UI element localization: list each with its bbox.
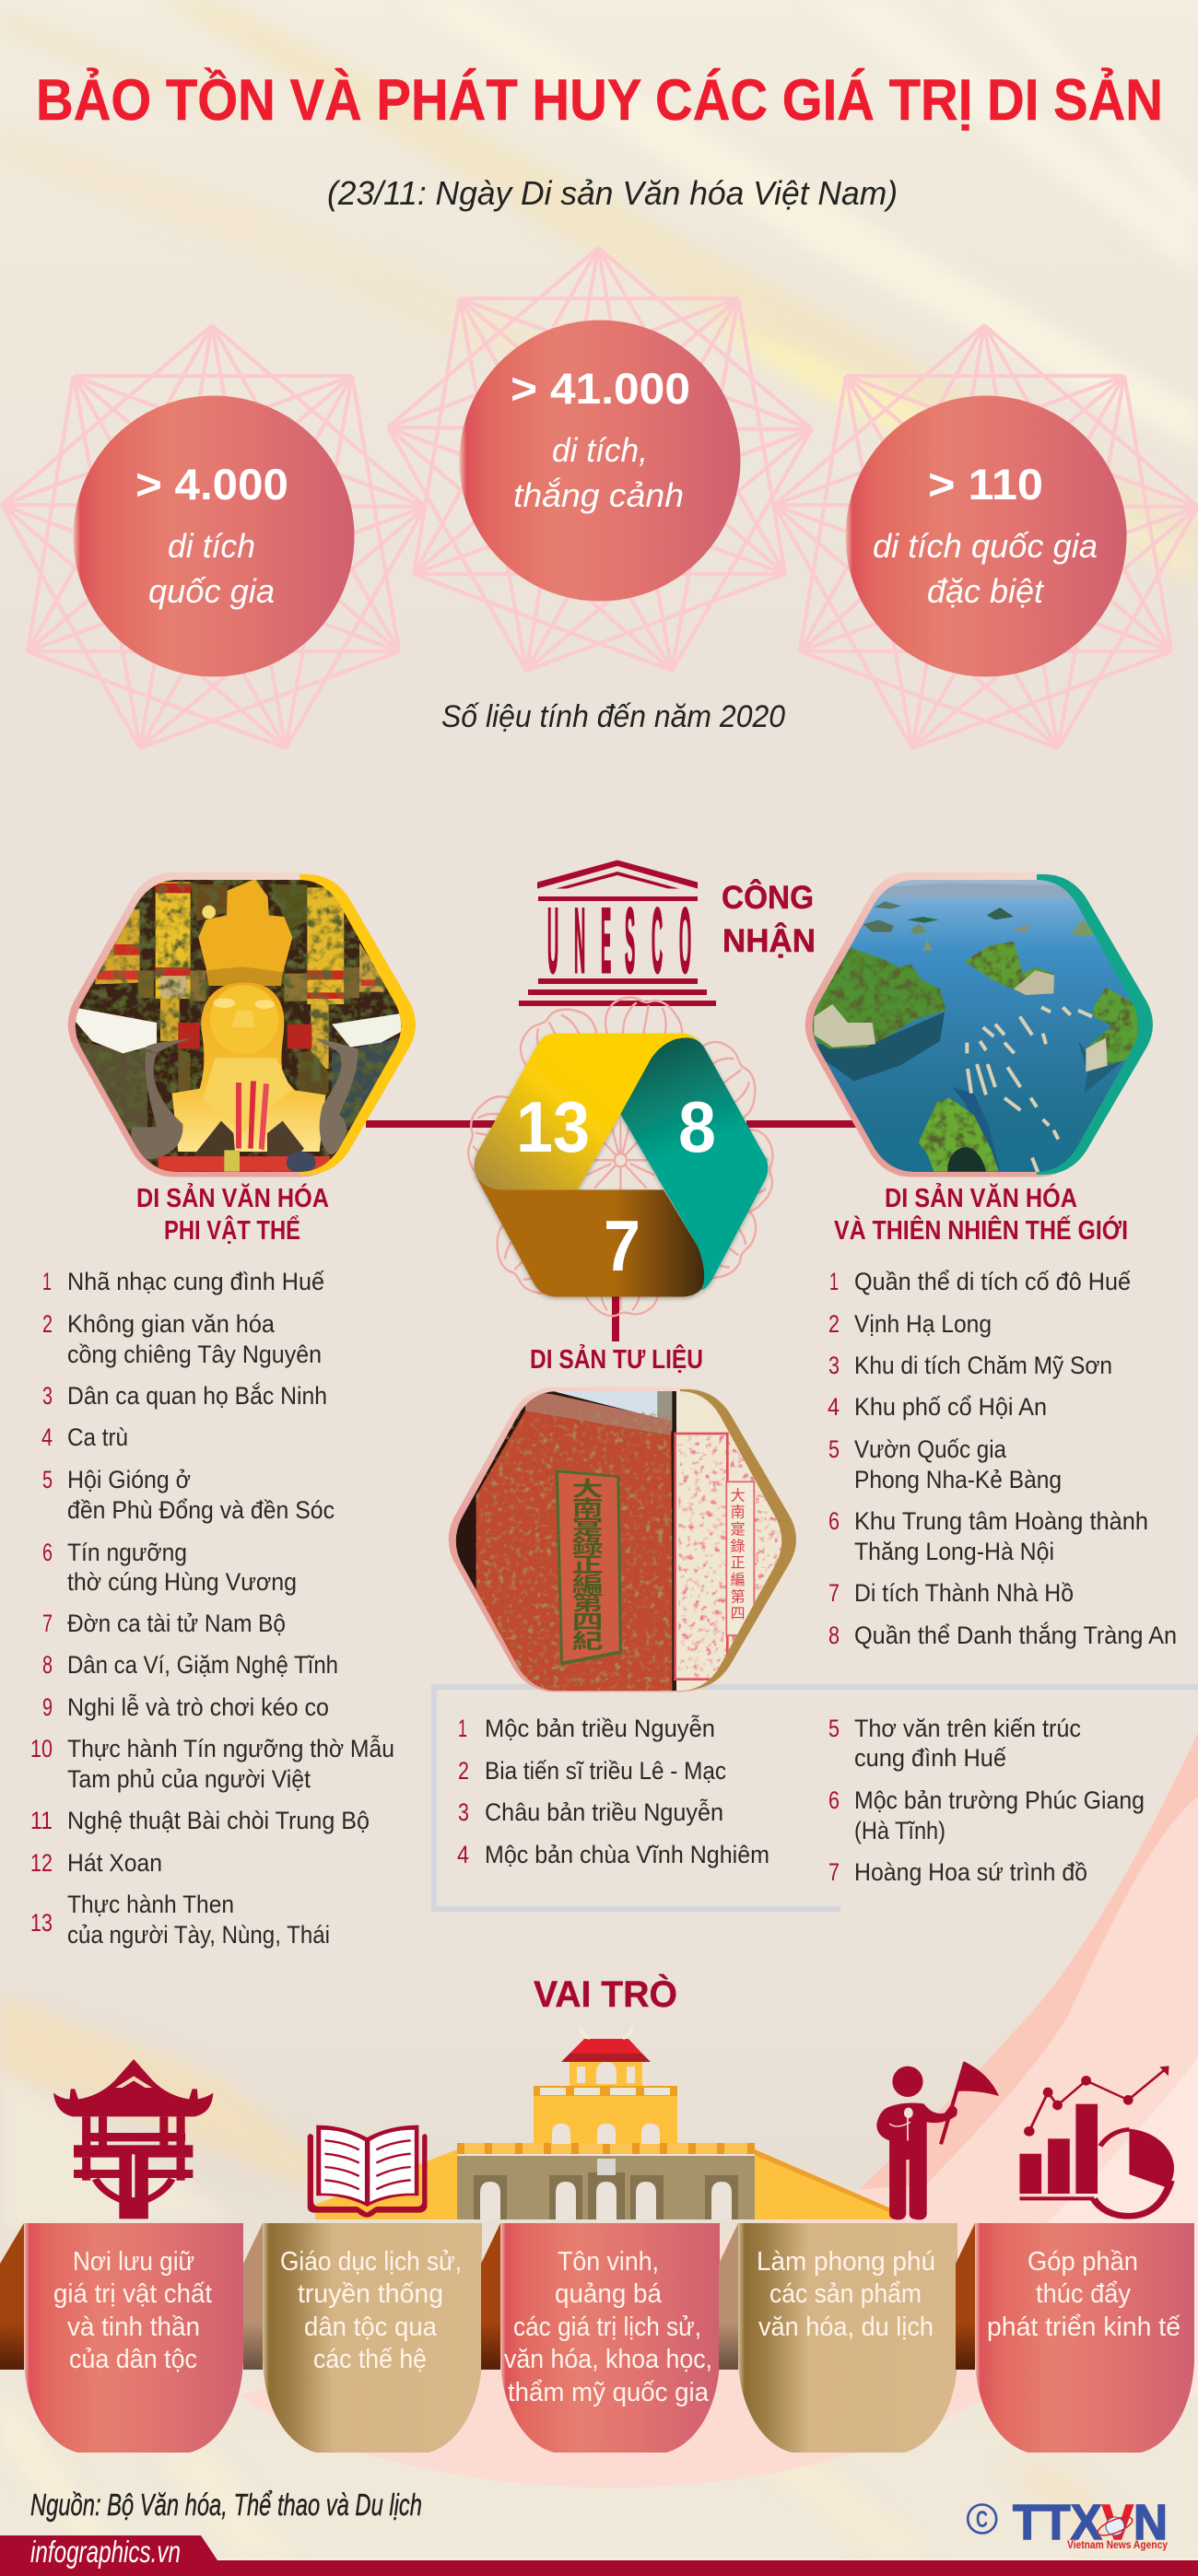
list: intangible heritage: 9	[42, 1693, 53, 1721]
list: intangible heritage: Đờn ca tài tử Nam Bộ	[67, 1610, 286, 1637]
list: world heritage: Thăng Long-Hà Nội	[854, 1538, 1054, 1565]
stat: relics and scenic sites: > 41.000	[511, 364, 690, 413]
card: honoring values: các giá trị lịch sử,	[513, 2313, 701, 2342]
UNESCO recognized label	[722, 879, 816, 959]
list: intangible heritage: Không gian văn hóa	[67, 1310, 276, 1338]
list: world heritage: 4	[828, 1393, 840, 1421]
website: infographics.vn	[30, 2535, 181, 2569]
list: intangible heritage: 1	[42, 1268, 52, 1295]
UNESCO logo	[519, 861, 716, 1006]
data note: Số liệu tính đến năm 2020	[441, 699, 785, 734]
card: honoring values	[481, 2223, 720, 2453]
card: preserving values: Nơi lưu giữ	[73, 2247, 194, 2277]
list: intangible heritage: Nghệ thuật Bài chòi Trung Bộ	[67, 1807, 370, 1834]
list: intangible heritage: Ca trù	[67, 1423, 128, 1451]
list: intangible heritage: 5	[42, 1466, 53, 1493]
list: intangible heritage: 11	[30, 1807, 53, 1834]
list: intangible heritage: Dân ca quan họ Bắc Ninh	[67, 1381, 327, 1410]
list: documentary heritage: 6	[828, 1786, 840, 1814]
list: documentary heritage: Mộc bản trường Phúc Giang	[854, 1786, 1145, 1814]
list: intangible heritage: Tam phủ của người Việt	[67, 1765, 311, 1793]
list: intangible heritage: đền Phù Đổng và đền Sóc	[67, 1496, 335, 1524]
list: intangible heritage: 4	[41, 1423, 53, 1451]
source note: Nguồn: Bộ Văn hóa, Thể thao và Du lịch	[30, 2488, 422, 2522]
list: intangible heritage: Tín ngưỡng	[67, 1539, 187, 1566]
hexagon photo: royal woodblock: 南	[731, 1505, 746, 1521]
card: educating history: các thế hệ	[313, 2345, 427, 2374]
list: world heritage: 7	[828, 1579, 840, 1607]
icon: open book	[308, 2125, 428, 2218]
hexagon photo: royal woodblock: 第	[572, 1592, 604, 1615]
card: preserving values: và tinh thần	[67, 2313, 200, 2342]
list: intangible heritage: 10	[30, 1735, 53, 1762]
list: documentary heritage: 5	[828, 1715, 840, 1742]
list: intangible heritage: Thực hành Then	[67, 1891, 234, 1918]
box around documentary heritage list	[434, 1687, 1198, 1909]
heading: world heritage	[834, 1182, 1128, 1246]
list: intangible heritage: 2	[42, 1310, 53, 1338]
footer bar	[0, 2535, 1198, 2576]
list: intangible heritage: thờ cúng Hùng Vương	[67, 1568, 297, 1596]
heading: roles: VAI TRÒ	[534, 1973, 677, 2015]
card: preserving values: giá trị vật chất	[53, 2279, 212, 2309]
count 8: 8	[678, 1086, 716, 1167]
stat: special national relics: đặc biệt	[927, 572, 1045, 610]
list: world heritage: 3	[828, 1352, 840, 1379]
list: documentary heritage: 7	[828, 1858, 840, 1886]
hexagon photo: intangible heritage statue	[68, 872, 416, 1177]
hexagon photo: royal woodblock: 錄	[731, 1538, 746, 1554]
hexagon photo: royal woodblock: 第	[731, 1587, 746, 1605]
card: preserving values: của dân tộc	[69, 2345, 197, 2374]
hexagon photo: royal woodblock: 編	[731, 1572, 746, 1588]
list: world heritage: Vịnh Hạ Long	[854, 1310, 992, 1338]
list: world heritage: 2	[828, 1310, 840, 1338]
card: enriching products	[719, 2223, 957, 2453]
hexagon photo: royal woodblock: 錄	[572, 1535, 604, 1558]
list: documentary heritage	[457, 1714, 1145, 1886]
illustration: Hanoi citadel flag tower	[315, 2027, 893, 2219]
hexagon photo: royal woodblock: 正	[731, 1556, 746, 1572]
list: documentary heritage: Mộc bản triều Nguyễn	[485, 1714, 715, 1742]
card: enriching products: Làm phong phú	[757, 2247, 935, 2277]
list: documentary heritage: 1	[458, 1715, 467, 1742]
list: documentary heritage: Thơ văn trên kiến trúc	[854, 1715, 1081, 1742]
heading: intangible heritage: DI SẢN VĂN HÓA	[136, 1182, 329, 1213]
hexagon photo: Ha Long Bay	[793, 872, 1161, 1177]
card: economic development: thúc đẩy	[1036, 2279, 1131, 2309]
list: intangible heritage: Dân ca Ví, Giặm Nghệ Tĩnh	[67, 1651, 338, 1679]
list: documentary heritage: 4	[457, 1841, 469, 1868]
card: educating history	[243, 2223, 482, 2453]
list: world heritage: Di tích Thành Nhà Hồ	[854, 1579, 1074, 1607]
card: honoring values: thẩm mỹ quốc gia	[508, 2378, 710, 2407]
list: world heritage	[828, 1268, 1177, 1649]
card: enriching products: văn hóa, du lịch	[758, 2313, 934, 2342]
list: intangible heritage: Nghi lễ và trò chơi kéo co	[67, 1692, 329, 1721]
heading: intangible heritage: PHI VẬT THỂ	[164, 1214, 300, 1246]
list: documentary heritage: 2	[458, 1757, 469, 1785]
hexagon photo: royal woodblock: 編	[572, 1574, 604, 1597]
heading: intangible heritage	[136, 1182, 329, 1246]
list: intangible heritage: 12	[30, 1849, 53, 1877]
UNESCO recognized label: CÔNG	[722, 879, 814, 916]
UNESCO recognized label: NHẬN	[722, 922, 816, 959]
ribbon: documentary heritage count	[476, 1177, 705, 1296]
list: intangible heritage: 7	[42, 1610, 53, 1637]
list: intangible heritage: của người Tày, Nùng, Thái	[67, 1921, 330, 1949]
list: world heritage: Quần thể di tích cố đô Huế	[854, 1268, 1131, 1295]
hexagon photo: royal woodblock: 大	[572, 1478, 604, 1501]
card: economic development	[956, 2223, 1194, 2453]
list: world heritage: 6	[828, 1507, 840, 1535]
list: intangible heritage: 13	[30, 1909, 53, 1937]
list: intangible heritage	[30, 1268, 394, 1949]
ribbon: intangible heritage count	[475, 1034, 702, 1189]
stat: relics and scenic sites: thắng cảnh	[513, 476, 684, 514]
list: documentary heritage: cung đình Huế	[854, 1744, 1006, 1772]
list: intangible heritage: 8	[42, 1651, 53, 1679]
hexagon photo: royal woodblock: 寔	[572, 1516, 604, 1540]
connector lines	[366, 1120, 857, 1341]
icon: one pillar pagoda	[53, 2059, 213, 2219]
ribbon hexagon with counts 13, 8, 7	[475, 1034, 768, 1296]
count 7: 7	[604, 1205, 640, 1286]
list: documentary heritage: Châu bản triều Nguyễn	[485, 1797, 723, 1826]
list: intangible heritage: Hát Xoan	[67, 1849, 162, 1877]
subtitle: (23/11: Ngày Di sản Văn hóa Việt Nam)	[327, 174, 898, 212]
list: intangible heritage: Nhã nhạc cung đình Huế	[67, 1268, 324, 1295]
list: world heritage: 5	[828, 1435, 840, 1463]
hexagon photo: royal woodblock: 南	[572, 1497, 604, 1520]
stat: special national relics: > 110	[928, 460, 1043, 509]
logo: TTXVN: TTXVN	[1013, 2495, 1168, 2550]
hexagon photo: royal woodblock: 四	[731, 1607, 746, 1622]
card: educating history: dân tộc qua	[304, 2313, 438, 2342]
ribbon: world heritage count	[620, 1037, 768, 1290]
list: world heritage: Vườn Quốc gia	[854, 1435, 1007, 1463]
icon: growth chart	[1019, 2066, 1174, 2216]
logo: TTXVN: Vietnam News Agency	[1067, 2540, 1169, 2551]
list: documentary heritage: Bia tiến sĩ triều Lê - Mạc	[485, 1757, 726, 1785]
stat: special national relics	[774, 325, 1198, 748]
card: economic development: Góp phần	[1028, 2247, 1138, 2277]
stat: national relics	[2, 325, 426, 748]
list: world heritage: Khu Trung tâm Hoàng thành	[854, 1507, 1148, 1535]
list: world heritage: Quần thể Danh thắng Tràng An	[854, 1621, 1177, 1649]
list: world heritage: Khu di tích Chăm Mỹ Sơn	[854, 1352, 1112, 1379]
hexagon photo: royal woodblock: 四	[572, 1611, 604, 1634]
list: world heritage: 8	[828, 1622, 840, 1649]
list: intangible heritage: Thực hành Tín ngưỡng thờ Mẫu	[67, 1734, 394, 1762]
card: honoring values: văn hóa, khoa học,	[504, 2345, 712, 2374]
heading: world heritage: VÀ THIÊN NHIÊN THẾ GIỚI	[834, 1214, 1128, 1246]
stat: national relics: quốc gia	[148, 572, 275, 610]
stat: relics and scenic sites: di tích,	[552, 431, 648, 469]
hexagon photo: royal woodblock	[442, 1382, 799, 1704]
list: documentary heritage: (Hà Tĩnh)	[854, 1817, 945, 1844]
card: educating history: Giáo dục lịch sử,	[280, 2247, 462, 2277]
icon: person with flag	[876, 2061, 999, 2219]
heading: world heritage: DI SẢN VĂN HÓA	[885, 1182, 1077, 1213]
hexagon photo: royal woodblock: 正	[572, 1554, 604, 1577]
card: educating history: truyền thống	[298, 2279, 443, 2309]
hexagon photo: royal woodblock: 紀	[572, 1631, 604, 1654]
card: honoring values: Tôn vinh,	[558, 2247, 659, 2277]
list: documentary heritage: 3	[458, 1798, 469, 1826]
stat: special national relics: di tích quốc gia	[873, 527, 1098, 565]
card: honoring values: quảng bá	[555, 2279, 663, 2309]
hexagon photo: royal woodblock: 大	[731, 1487, 746, 1504]
list: world heritage: Phong Nha-Kẻ Bàng	[854, 1466, 1062, 1493]
card: enriching products: các sản phẩm	[769, 2279, 922, 2309]
list: documentary heritage: Mộc bản chùa Vĩnh Nghiêm	[485, 1841, 769, 1868]
stat: relics and scenic sites	[388, 248, 812, 671]
list: world heritage: 1	[829, 1268, 839, 1295]
list: intangible heritage: Hội Gióng ở	[67, 1466, 191, 1493]
hexagon photo: royal woodblock: 寔	[731, 1520, 746, 1538]
card: preserving values	[0, 2223, 243, 2453]
logo: TTXVN: C	[976, 2507, 988, 2533]
list: documentary heritage: Hoàng Hoa sứ trình đồ	[854, 1858, 1087, 1886]
list: intangible heritage: cồng chiêng Tây Nguyên	[67, 1341, 322, 1368]
card: economic development: phát triển kinh tế	[987, 2313, 1180, 2342]
flower behind ribbon	[463, 991, 777, 1316]
heading: documentary heritage: DI SẢN TƯ LIỆU	[530, 1343, 703, 1375]
count 13: 13	[516, 1086, 590, 1167]
list: intangible heritage: 3	[42, 1382, 53, 1410]
UNESCO logo: UNESCO	[547, 891, 691, 992]
list: intangible heritage: 6	[42, 1539, 53, 1566]
stat: national relics: > 4.000	[135, 460, 288, 509]
list: world heritage: Khu phố cổ Hội An	[854, 1393, 1047, 1421]
stat: national relics: di tích	[168, 527, 255, 565]
